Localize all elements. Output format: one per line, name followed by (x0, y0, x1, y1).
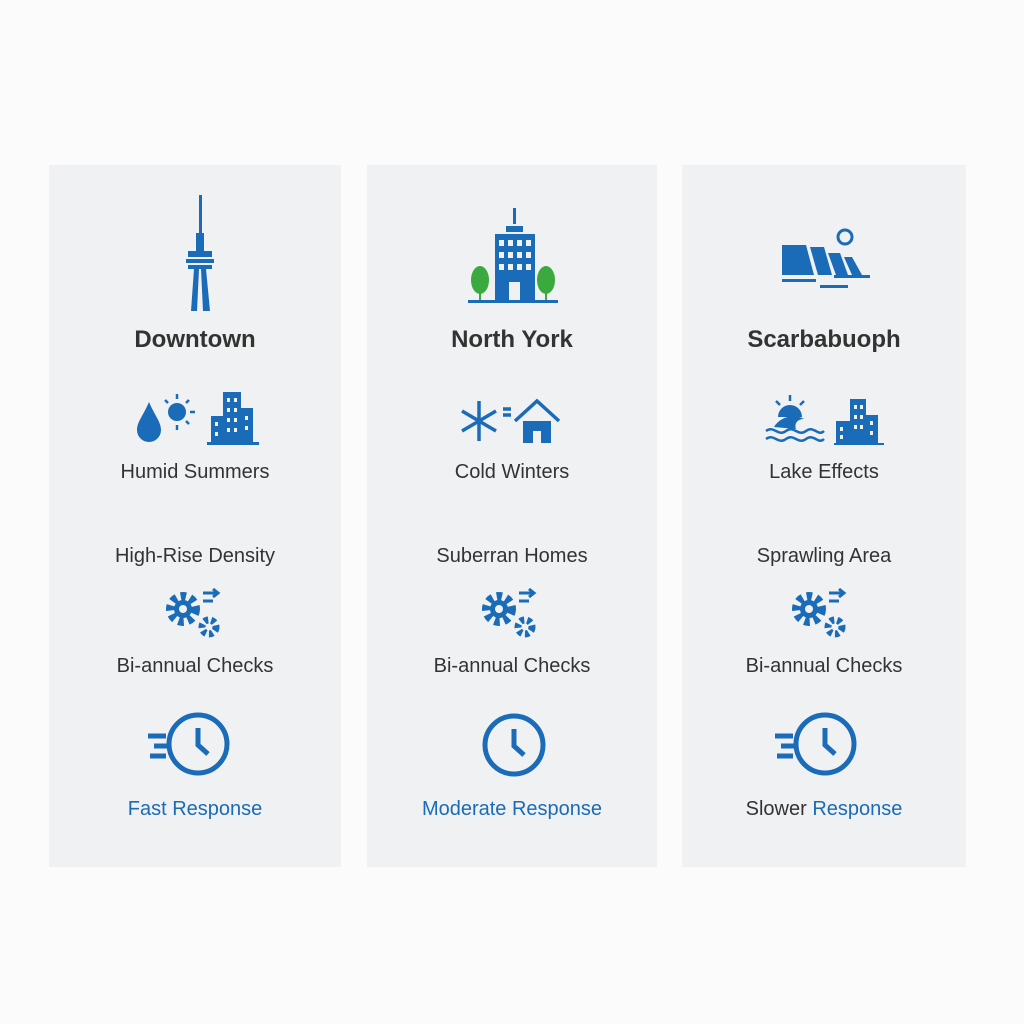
panel: Downtown (49, 165, 341, 867)
label: Slower Response (746, 798, 902, 820)
icon: snowflake + house (461, 398, 560, 443)
label: density: High-Rise Density (115, 545, 275, 567)
icon: fast clock (148, 712, 230, 776)
label: Cold Winters (455, 461, 569, 483)
icon: building with trees (468, 208, 558, 303)
title: Scarbabuoph (747, 326, 901, 353)
label: humid summers: Humid Summers (121, 461, 269, 483)
title: Downtown (134, 326, 256, 353)
label: Suberran Homes (436, 545, 588, 567)
panel: Scarborough (682, 165, 966, 867)
icon: bluffs (782, 228, 870, 288)
icon: gears (792, 588, 846, 638)
icon: CN tower (186, 195, 214, 311)
panel: North York (367, 165, 657, 867)
label: Sprawling Area (757, 545, 891, 567)
icon: clock (775, 712, 856, 776)
label: Lake Effects (769, 461, 879, 483)
icon: lake + buildings (765, 395, 884, 445)
icon: humid + highrise (137, 392, 259, 445)
title: North York (451, 326, 573, 353)
label: Bi-annual Checks (746, 655, 902, 677)
icon: gears (482, 588, 536, 638)
label: checks: Bi-annual Checks (117, 655, 273, 677)
icon: clock (482, 714, 546, 776)
label: Moderate Response (422, 798, 602, 820)
label: response: Fast Response (128, 798, 262, 820)
icon: gears (166, 588, 220, 638)
label: Bi-annual Checks (434, 655, 590, 677)
